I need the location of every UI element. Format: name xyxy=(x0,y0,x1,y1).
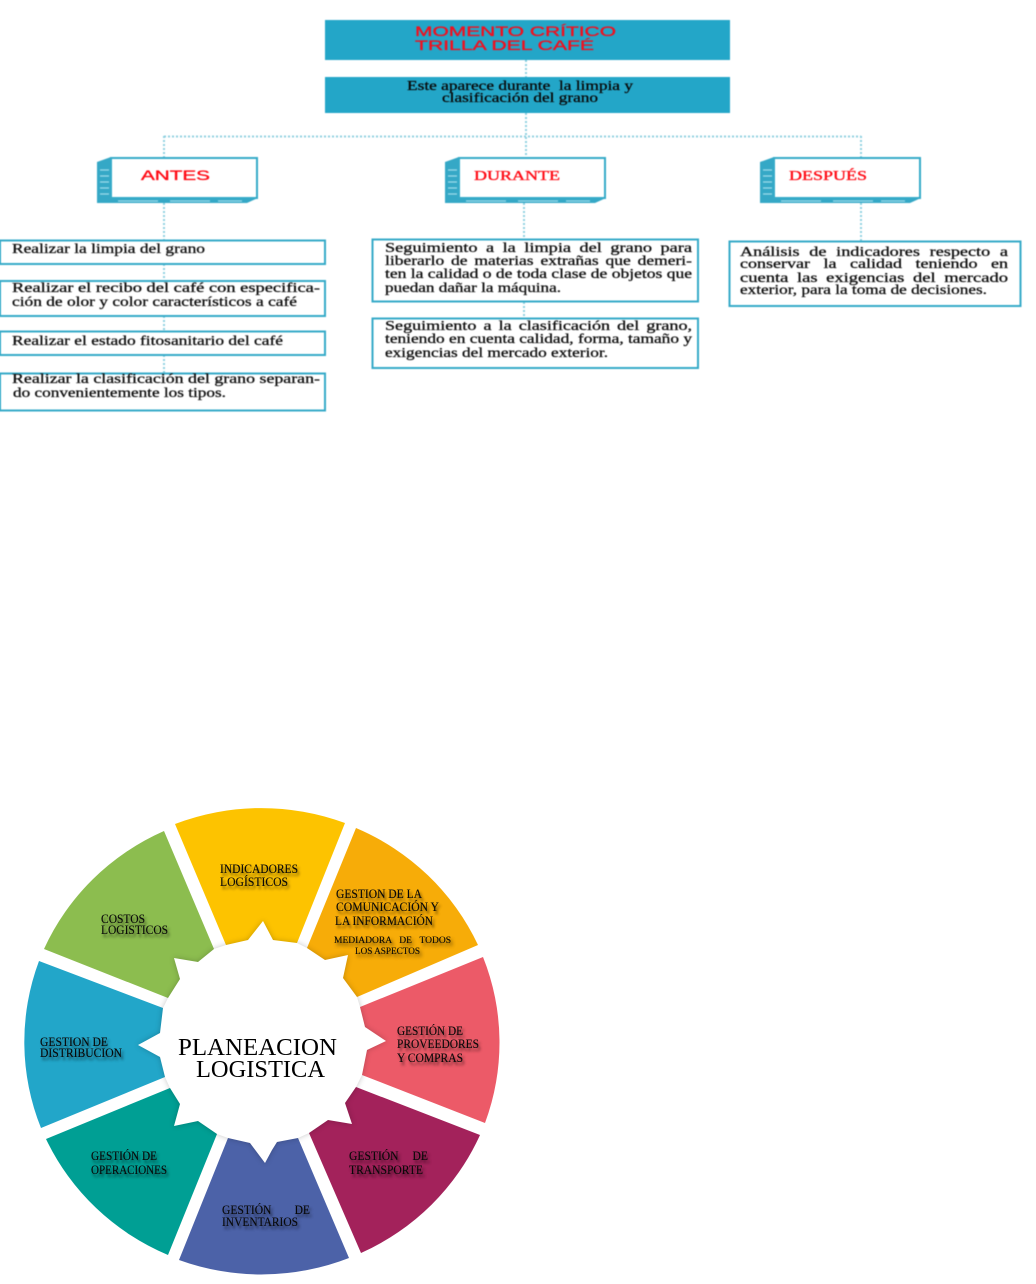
durante box 1 xyxy=(372,240,698,302)
wheel: planeación logística xyxy=(24,808,499,1274)
segment: costos logísticos: COSTOS xyxy=(101,912,145,926)
segment: gestión de distribución xyxy=(24,961,262,1128)
después box: exterior, para la toma de decisiones. xyxy=(740,283,987,298)
segment: gestión de la comunicación: LA INFORMACIÓN xyxy=(335,914,433,928)
segment: gestión de operaciones: OPERACIONES xyxy=(91,1163,167,1177)
durante box 2: teniendo en cuenta calidad, forma, tamaño y xyxy=(385,332,692,347)
center hub: planeacion logistica xyxy=(138,921,386,1163)
durante box 1: liberarlo de materias extrañas que demeri- xyxy=(385,254,692,269)
segment: gestión de distribución: DISTRIBUCION xyxy=(40,1046,122,1060)
segment: costos logísticos xyxy=(44,831,262,1042)
header: ANTES xyxy=(97,157,258,203)
header: DESPUÉS: DESPUÉS xyxy=(789,167,867,184)
segment: gestión de proveedores: GESTIÓN DE xyxy=(397,1024,463,1038)
segment: gestión de proveedores xyxy=(262,957,499,1123)
segment: gestión de operaciones xyxy=(46,1042,262,1255)
segment: gestión de transporte: TRANSPORTE xyxy=(349,1163,423,1177)
antes box 1: Realizar la limpia del grano xyxy=(12,242,205,257)
segment: gestión de la comunicación: COMUNICACIÓN Y xyxy=(336,900,439,914)
antes box 1 xyxy=(0,240,325,264)
después box: Análisis de indicadores respecto a xyxy=(740,245,1009,260)
segment: gestión de operaciones: GESTIÓN DE xyxy=(91,1149,157,1163)
segment: gestión de inventarios: INVENTARIOS xyxy=(222,1215,298,1229)
title box: momento crítico xyxy=(325,20,730,60)
antes box 4: Realizar la clasificación del grano separan- xyxy=(12,372,320,387)
durante box 2: Seguimiento a la clasificación del grano, xyxy=(385,319,692,334)
subtitle box: clasificación del grano xyxy=(442,91,598,106)
antes box 3: Realizar el estado fitosanitario del café xyxy=(12,334,283,349)
segment: gestión de inventarios xyxy=(179,1042,349,1274)
header: ANTES: ANTES xyxy=(141,167,210,183)
segment: gestión de la comunicación xyxy=(262,828,478,1042)
segment: gestión de transporte xyxy=(262,1042,480,1253)
subtitle box xyxy=(325,77,730,113)
durante box 2 xyxy=(372,318,698,368)
segment: gestión de transporte: GESTIÓN DE xyxy=(349,1149,428,1163)
segment: gestión de la comunicación: GESTION DE LA xyxy=(336,887,422,901)
subtitle box: Este aparece durante la limpia y xyxy=(407,79,633,94)
antes box 2: Realizar el recibo del café con especifica- xyxy=(12,281,320,296)
segment: gestión de proveedores: PROVEEDORES xyxy=(397,1037,479,1051)
antes box 3 xyxy=(0,332,325,355)
antes box 2 xyxy=(0,281,325,316)
durante box 1: puedan dañar la máquina. xyxy=(385,281,561,296)
segment: costos logísticos: LOGISTICOS xyxy=(101,923,168,937)
después box: conservar la calidad teniendo en xyxy=(740,257,1008,272)
center hub: planeacion logistica: PLANEACION xyxy=(178,1035,337,1061)
segment: gestión de la comunicación: MEDIADORA DE TODOS xyxy=(334,935,451,945)
antes box 2: ción de olor y color característicos a café xyxy=(12,295,297,310)
header: DURANTE xyxy=(445,157,606,203)
después box xyxy=(730,242,1020,306)
segment: gestión de la comunicación: LOS ASPECTOS xyxy=(355,946,420,956)
durante box 1: Seguimiento a la limpia del grano para xyxy=(385,241,693,256)
segment: gestión de inventarios: GESTIÓN DE xyxy=(222,1203,310,1217)
segment: indicadores logísticos xyxy=(175,808,345,1042)
center hub: planeacion logistica: LOGISTICA xyxy=(196,1057,326,1083)
title box: momento crítico: MOMENTO CRÍTICO xyxy=(415,23,616,39)
segment: gestión de proveedores: Y COMPRAS xyxy=(397,1051,463,1065)
segment: indicadores logísticos: INDICADORES xyxy=(220,862,298,876)
segment: indicadores logísticos: LOGÍSTICOS xyxy=(220,875,288,889)
header: DURANTE: DURANTE xyxy=(474,169,560,184)
durante box 2: exigencias del mercado exterior. xyxy=(385,346,608,361)
antes box 4 xyxy=(0,372,325,410)
header: DESPUÉS xyxy=(760,157,921,203)
durante box 1: ten la calidad o de toda clase de objetos que xyxy=(385,267,692,282)
segment: gestión de distribución: GESTION DE xyxy=(40,1035,108,1049)
después box: cuenta las exigencias del mercado xyxy=(740,271,1008,286)
title box: momento crítico: TRILLA DEL CAFÉ xyxy=(415,37,594,53)
antes box 4: do convenientemente los tipos. xyxy=(13,386,226,401)
